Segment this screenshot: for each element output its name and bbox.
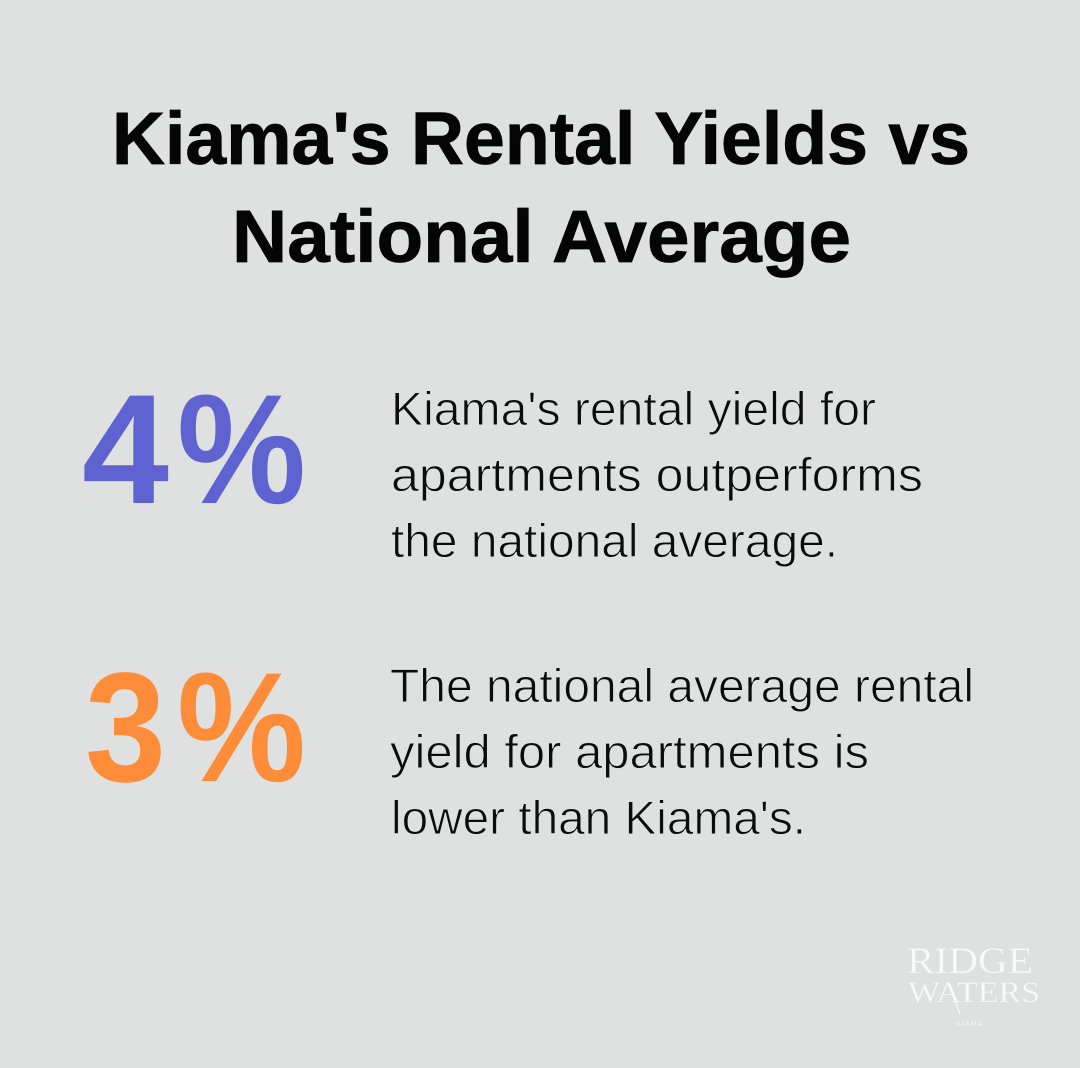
panel: Kiama statistic	[82, 363, 923, 567]
text block: Kiama description	[391, 382, 923, 567]
logo: Ridge Waters Kiama	[907, 941, 1040, 1028]
panel: national statistic	[85, 641, 974, 844]
text block: national description	[390, 659, 974, 844]
big number: 4%: %	[177, 363, 306, 537]
big number: 4%	[82, 363, 306, 537]
big number: 3%: %	[177, 641, 306, 815]
title	[112, 97, 970, 278]
logo: Ridge Waters Kiama: RIDGE	[907, 941, 1033, 982]
text block: national description: yield for apartments is	[390, 725, 869, 778]
logo: Ridge Waters Kiama: KIAMA	[956, 1021, 982, 1028]
big number: 3%	[85, 641, 306, 815]
text block: Kiama description: apartments outperforms	[391, 448, 923, 501]
title: National Average	[232, 195, 851, 278]
text block: national description: The national average rental	[390, 659, 974, 712]
big number: 3%: 3	[85, 641, 166, 815]
big number: 4%: 4	[82, 363, 169, 537]
title: Kiama's Rental Yields vs	[112, 97, 970, 180]
text block: Kiama description: Kiama's rental yield for	[391, 382, 876, 435]
text block: Kiama description: the national average.	[391, 514, 838, 567]
logo: Ridge Waters Kiama: WATERS	[908, 976, 1040, 1009]
text block: national description: lower than Kiama's.	[391, 791, 806, 844]
